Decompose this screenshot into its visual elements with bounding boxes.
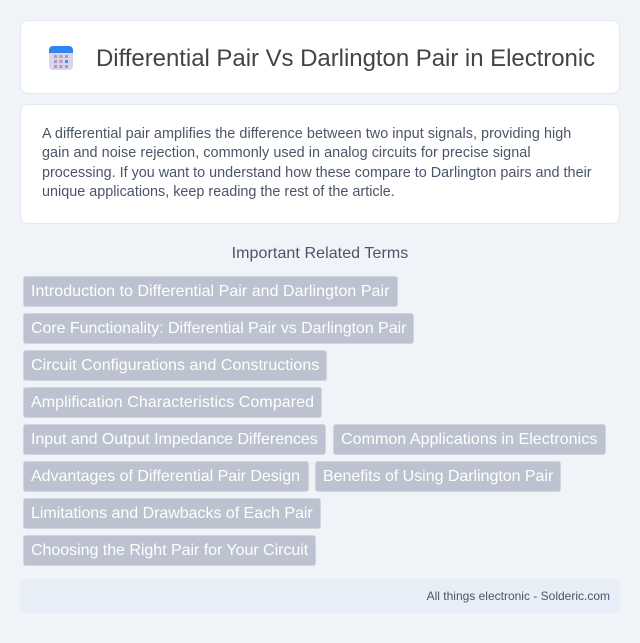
tag 1 <box>23 276 398 307</box>
footer text: All things electronic - Solderic.com <box>427 589 610 603</box>
tag 5 <box>23 424 326 455</box>
tag 4: Amplification Characteristics Compared <box>31 394 314 411</box>
related term tags <box>23 276 606 566</box>
icon: calendar <box>49 46 73 70</box>
tag 3: Circuit Configurations and Constructions <box>31 357 319 374</box>
tag 1: Introduction to Differential Pair and Darlington Pair <box>31 283 389 300</box>
header card <box>20 20 620 94</box>
title: Differential Pair Vs Darlington Pair in Electronic <box>96 45 595 72</box>
intro text: processing. If you want to understand how these compare to Darlington pairs and their <box>42 165 592 181</box>
tag 6 <box>333 424 606 455</box>
tag 9 <box>23 498 321 529</box>
intro text: unique applications, keep reading the rest of the article. <box>42 184 395 200</box>
footer bar <box>20 579 620 613</box>
tag 3 <box>23 350 327 381</box>
tag 2: Core Functionality: Differential Pair vs Darlington Pair <box>31 320 406 337</box>
tag 4 <box>23 387 322 418</box>
section heading: Important Related Terms <box>232 245 408 262</box>
tag 7 <box>23 461 309 492</box>
tag 8: Benefits of Using Darlington Pair <box>323 468 553 485</box>
tag 7: Advantages of Differential Pair Design <box>31 468 300 485</box>
tag 10: Choosing the Right Pair for Your Circuit <box>31 542 308 559</box>
tag 10 <box>23 535 316 566</box>
tag 8 <box>315 461 561 492</box>
intro card <box>20 104 620 224</box>
intro text <box>42 126 592 200</box>
intro text: gain and noise rejection, commonly used in analog circuits for precise signal <box>42 145 531 161</box>
tag 9: Limitations and Drawbacks of Each Pair <box>31 505 313 522</box>
intro text: A differential pair amplifies the difference between two input signals, providing high <box>42 126 571 142</box>
tag 5: Input and Output Impedance Differences <box>31 431 318 448</box>
tag 2 <box>23 313 414 344</box>
tag 6: Common Applications in Electronics <box>341 431 597 448</box>
